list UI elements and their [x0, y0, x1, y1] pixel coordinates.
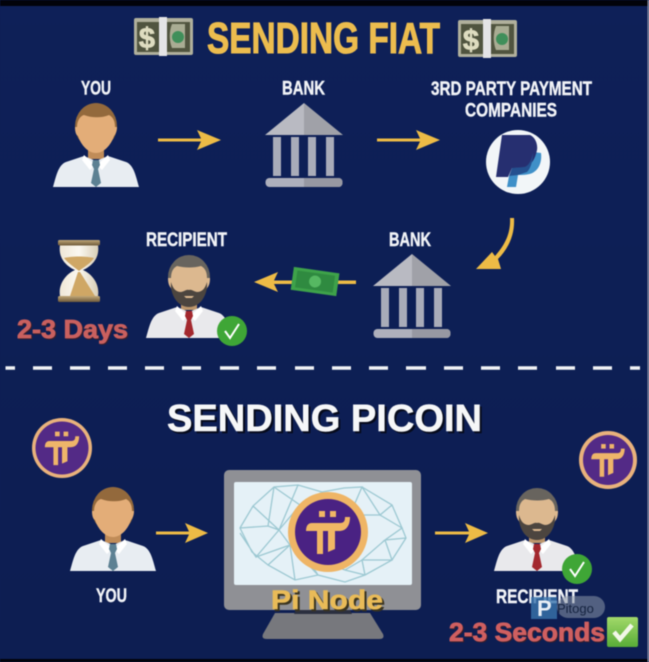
heading: sending fiat: SENDING FIAT — [207, 14, 440, 63]
label: recipient: RECIPIENT — [146, 230, 227, 251]
label: second bank: BANK — [389, 230, 431, 251]
arrow: bank to payment companies — [377, 130, 440, 150]
label: 3rd party payment companies — [431, 79, 592, 122]
heading: sending picoin: SENDING PICOIN — [169, 400, 484, 442]
icon: recipient person — [146, 255, 232, 338]
label: you: YOU — [81, 78, 111, 100]
icon: green check — [562, 554, 592, 584]
title: sending fiat — [134, 14, 517, 63]
watermark: pitogo: Pitogo — [557, 601, 594, 616]
icon: pi coin right — [579, 431, 637, 489]
panel: sending fiat flow — [17, 78, 592, 346]
icon: paypal logo — [486, 130, 550, 194]
label: 3rd party payment companies: COMPANIES — [465, 100, 557, 122]
heading: sending picoin: SENDING PICOIN — [167, 398, 482, 440]
label: you: YOU — [96, 586, 127, 607]
label: pi node: Pi Node — [271, 585, 383, 615]
icon: banknote — [291, 267, 339, 296]
arrow: you to pi node — [156, 523, 208, 543]
arrow: you to bank — [158, 130, 221, 150]
arrow: money to recipient — [254, 267, 356, 296]
label: 2-3 seconds: 2-3 Seconds — [450, 618, 606, 648]
icon: computer with pi node — [224, 470, 421, 639]
monitor frame — [224, 470, 421, 610]
label: pi node: Pi Node — [273, 587, 385, 617]
label: 2-3 seconds: 2-3 Seconds — [449, 617, 605, 647]
label: bank: BANK — [282, 78, 325, 100]
watermark: pitogo: P — [537, 596, 552, 621]
label: 2-3 days: 2-3 Days — [18, 315, 129, 345]
pi coin emblem — [288, 492, 368, 572]
label: recipient: RECIPIENT — [496, 587, 578, 608]
divider — [6, 366, 640, 370]
watermark: pitogo — [531, 596, 605, 621]
label: 2-3 days: 2-3 Days — [17, 314, 128, 344]
monitor screen — [234, 482, 412, 585]
icon: sender person — [53, 103, 139, 187]
icon: sender person — [70, 487, 156, 571]
icon: first bank — [265, 103, 343, 187]
icon: pi coin left — [32, 418, 92, 478]
icon: recipient person — [494, 488, 580, 571]
label: 3rd party payment companies: 3RD PARTY PAYMENT — [431, 79, 592, 100]
panel: sending picoin flow — [32, 418, 638, 648]
icon: cash right — [458, 19, 517, 58]
icon: cash left — [134, 17, 193, 56]
network mesh — [240, 485, 406, 582]
icon: hourglass — [58, 240, 100, 302]
icon: second bank — [373, 254, 451, 338]
monitor stand — [262, 613, 384, 639]
arrow: pi node to recipient — [435, 523, 488, 543]
icon: green check — [217, 316, 247, 346]
icon: check box — [607, 617, 638, 647]
arrow: curved down to bank — [476, 218, 514, 269]
